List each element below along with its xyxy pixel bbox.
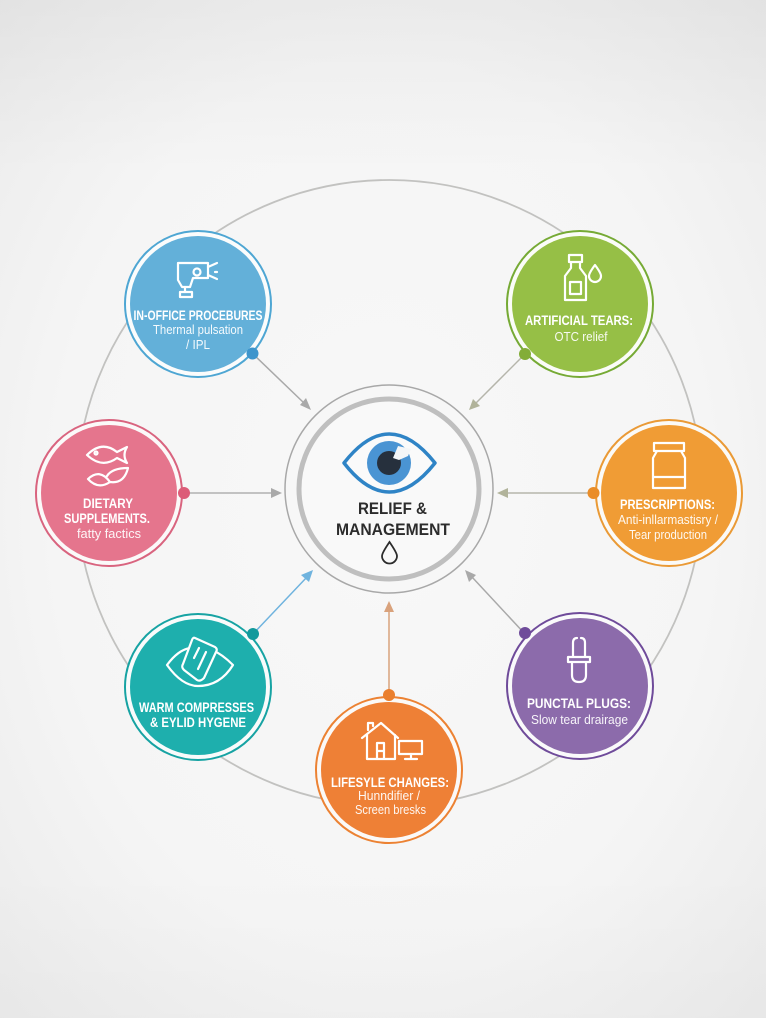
- node: dietary supplements: [36, 420, 190, 566]
- label: DIETARY: [83, 496, 133, 511]
- label: ARTIFICIAL TEARS:: [525, 313, 633, 328]
- label: WARM COMPRESSES: [139, 700, 254, 715]
- hub title: RELIEF &: [358, 499, 427, 518]
- hub title: MANAGEMENT: [336, 520, 451, 539]
- icon: fish and leaf: [87, 447, 128, 485]
- label: Screen bresks: [355, 802, 426, 817]
- label: [139, 700, 254, 730]
- label: IN-OFFICE PROCEBURES: [134, 308, 262, 323]
- label: PUNCTAL PLUGS:: [527, 696, 631, 711]
- icon: plug: [568, 638, 590, 682]
- label: / IPL: [186, 337, 210, 352]
- node: artificial tears: [507, 231, 653, 377]
- label: OTC relief: [554, 329, 608, 344]
- label: SUPPLEMENTS.: [64, 511, 150, 526]
- arrow: warm compresses to center: [253, 570, 313, 634]
- icon: tear drop: [382, 542, 397, 564]
- arrow: prescriptions to center: [497, 488, 593, 498]
- arrow: dietary supplements to center: [183, 488, 282, 498]
- node: lifestyle changes: [316, 689, 462, 843]
- node: prescriptions: [588, 420, 742, 566]
- arrow: lifestyle changes to center: [384, 601, 394, 695]
- center hub: [285, 385, 493, 593]
- arrow: punctal plugs to center: [465, 570, 525, 634]
- label: Slow tear drairage: [531, 712, 628, 727]
- outer orbit ring: [76, 180, 702, 806]
- label: [331, 775, 449, 817]
- label: fatty factics: [77, 526, 141, 541]
- label: Thermal pulsation: [153, 322, 243, 337]
- icon: eye: [344, 434, 435, 492]
- icon: house and monitor: [362, 723, 422, 759]
- icon: device: [178, 263, 217, 297]
- icon: jar: [653, 443, 685, 488]
- icon: compress over eye: [167, 638, 233, 686]
- icon: bottle and drop: [565, 255, 601, 300]
- label: Tear production: [629, 527, 707, 542]
- label: [527, 696, 631, 727]
- label: Hunndifier /: [358, 788, 420, 803]
- label: & EYLID HYGENE: [150, 715, 246, 730]
- node: in-office procedures: [125, 231, 271, 377]
- arrow: artificial tears to center: [469, 354, 525, 410]
- label: [64, 496, 150, 541]
- label: PRESCRIPTIONS:: [620, 497, 715, 512]
- label: [525, 313, 633, 344]
- arrow: in-office procedures to center: [252, 353, 311, 410]
- label: [134, 308, 262, 352]
- label: LIFESYLE CHANGES:: [331, 775, 449, 790]
- node: warm compresses and eyelid hygiene: [125, 614, 271, 760]
- node: punctal plugs: [507, 613, 653, 759]
- hub title: [336, 499, 451, 539]
- label: Anti-inllarmastisry /: [618, 512, 718, 527]
- label: [618, 497, 718, 542]
